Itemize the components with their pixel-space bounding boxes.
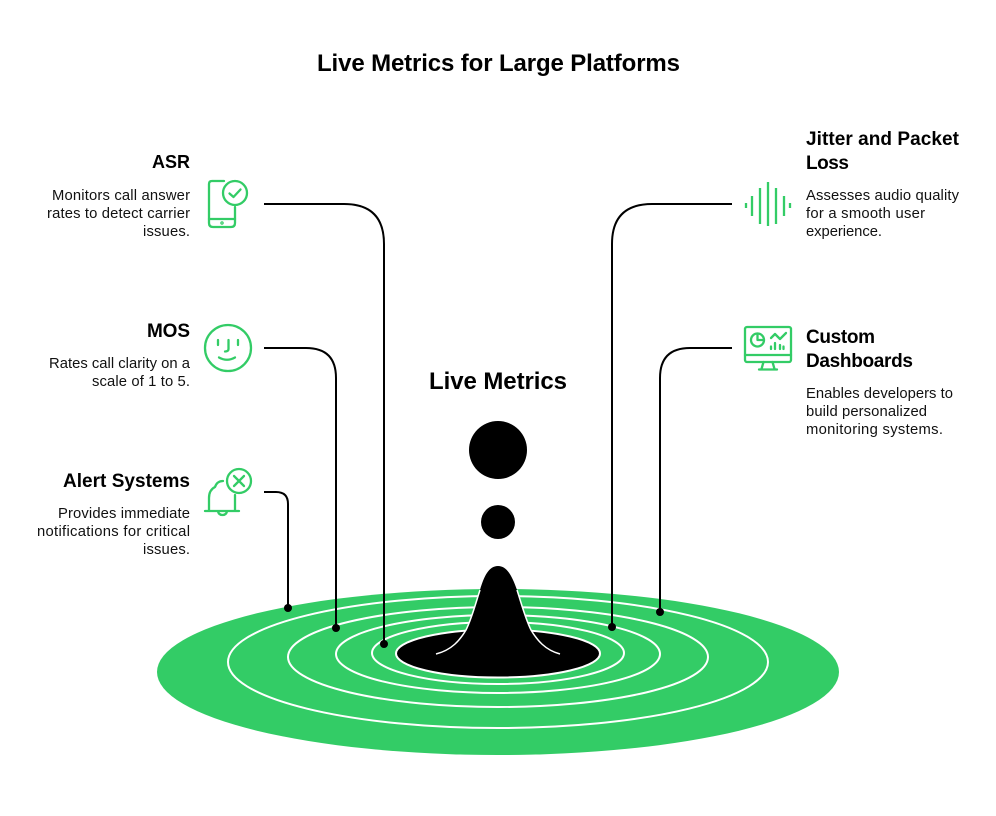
text: Custom Dashboards description — [806, 386, 953, 438]
connector: Custom Dashboards — [656, 348, 732, 616]
heading: Custom Dashboards — [806, 327, 913, 372]
icon: phone with check — [209, 181, 247, 227]
text: Jitter and Packet Loss description: for a smooth user — [806, 206, 925, 222]
panel: Alert Systems — [37, 469, 251, 558]
panel: Custom Dashboards — [745, 327, 953, 438]
falling drop: large — [469, 421, 527, 479]
ripple pond graphic — [157, 566, 839, 755]
icon: smiling face — [205, 325, 251, 371]
text: Alert Systems description: Provides immediate — [58, 506, 190, 522]
text: Custom Dashboards description: build personalized — [806, 404, 927, 420]
text: Alert Systems description: notifications for critical — [37, 524, 190, 540]
text: Custom Dashboards description: Enables developers to — [806, 386, 953, 402]
panel: Jitter and Packet Loss — [746, 129, 960, 240]
text: Jitter and Packet Loss description: Assesses audio quality — [806, 188, 960, 204]
heading: MOS: MOS — [147, 321, 190, 342]
icon: sound wave — [746, 182, 790, 226]
icon: bell with cross — [205, 469, 251, 515]
falling drop: small — [481, 505, 515, 539]
text: MOS description: Rates call clarity on a — [49, 356, 191, 372]
text: ASR description: rates to detect carrier — [47, 206, 190, 222]
connector: ASR — [264, 204, 388, 648]
heading: ASR: ASR — [152, 152, 190, 172]
heading: Jitter and Packet Loss: Loss — [806, 153, 849, 174]
text: Alert Systems description — [37, 506, 190, 558]
text: Jitter and Packet Loss description — [806, 188, 960, 240]
text: MOS description: scale of 1 to 5. — [92, 374, 190, 390]
heading: Jitter and Packet Loss: Jitter and Packet — [806, 129, 960, 150]
connector: Jitter and Packet Loss — [608, 204, 732, 631]
text: Alert Systems description: issues. — [143, 542, 190, 558]
text: Jitter and Packet Loss description: experience. — [806, 224, 882, 240]
title: Live Metrics for Large Platforms — [317, 50, 680, 77]
text: ASR description: Monitors call answer — [52, 188, 190, 204]
heading: Jitter and Packet Loss — [806, 129, 960, 174]
heading: Alert Systems: Alert Systems — [63, 471, 190, 492]
text: MOS description — [49, 356, 191, 390]
panel: ASR — [47, 152, 247, 240]
heading: Custom Dashboards: Custom — [806, 327, 875, 348]
heading: Custom Dashboards: Dashboards — [806, 351, 913, 372]
text: ASR description — [47, 188, 190, 240]
panel: MOS — [49, 321, 251, 390]
icon: monitor dashboard — [745, 327, 791, 370]
connector: MOS — [264, 348, 340, 632]
text: ASR description: issues. — [143, 224, 190, 240]
central label: Live Metrics: Live Metrics — [429, 368, 567, 395]
connector: Alert Systems — [264, 492, 292, 612]
text: Custom Dashboards description: monitoring systems. — [806, 422, 943, 438]
